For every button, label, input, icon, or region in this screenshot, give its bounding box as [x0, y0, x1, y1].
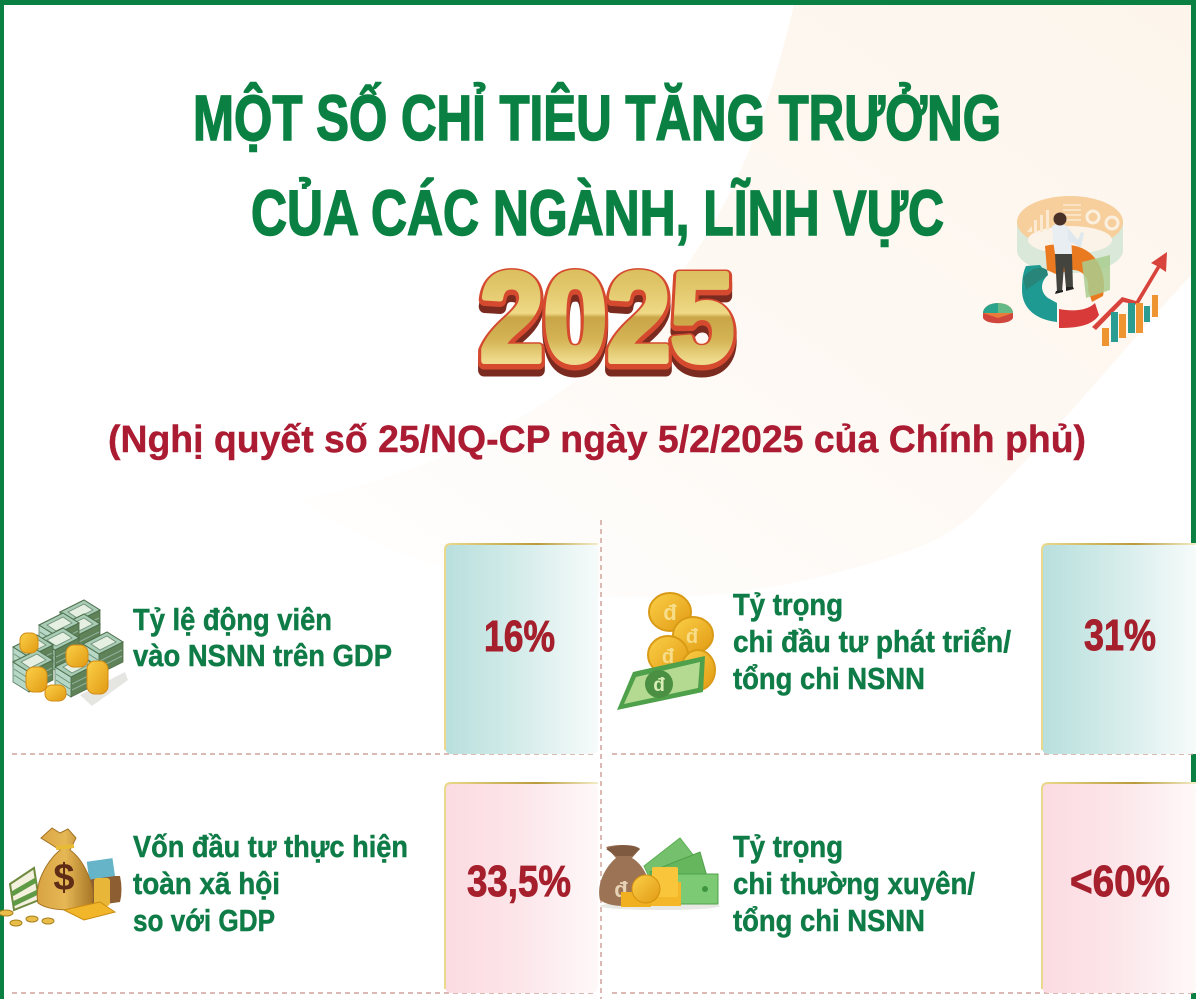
value box: 31% [1084, 611, 1156, 660]
panel: tax mobilisation rate [13, 544, 598, 754]
value box [445, 783, 598, 993]
year 2025: 2025 [480, 249, 734, 390]
value box [445, 544, 598, 754]
label [733, 587, 1011, 696]
icon: money bag, cash, gold bar and coins: $ [53, 857, 75, 899]
icon: dong coins and banknote [617, 593, 715, 710]
label: Tỷ trọng [733, 829, 843, 864]
label: vào NSNN trên GDP [133, 638, 392, 673]
panel: total social investment [0, 783, 598, 993]
illustration: analyst with charts [983, 196, 1167, 346]
value box [1042, 783, 1196, 993]
icon: dong coins and banknote: đ [653, 675, 665, 696]
label: toàn xã hội [133, 866, 280, 901]
label: Vốn đầu tư thực hiện [133, 829, 408, 864]
label: tổng chi NSNN [733, 661, 925, 696]
icon: dong coins and banknote: đ [663, 600, 677, 625]
label: chi thường xuyên/ [733, 866, 975, 901]
label: chi đầu tư phát triển/ [733, 624, 1011, 659]
panel: recurrent spending share [599, 783, 1196, 993]
year 2025: 2025 [480, 256, 734, 397]
icon: sack, banknotes and coins: đ [614, 877, 628, 902]
dashed dividers [12, 520, 1196, 999]
subtitle: (Nghị quyết số 25/NQ-CP ngày 5/2/2025 của Chính phủ) [108, 419, 1086, 461]
value box: <60% [1070, 857, 1170, 906]
icon: dong coins and banknote: đ [662, 646, 675, 668]
panel: development investment share [617, 544, 1196, 754]
label: Tỷ lệ động viên [133, 602, 332, 637]
label [733, 829, 975, 938]
label: so với GDP [133, 903, 275, 938]
value box: 33,5% [467, 857, 571, 906]
label: tổng chi NSNN [733, 903, 925, 938]
icon: dong coins and banknote: đ [686, 626, 699, 648]
value box: 16% [484, 612, 555, 661]
value box [1042, 544, 1196, 754]
label: Tỷ trọng [733, 587, 843, 622]
title: CỦA CÁC NGÀNH, LĨNH VỰC [251, 176, 944, 249]
icon: money stacks and coins [13, 600, 128, 706]
year 2025: 2025 [480, 247, 734, 388]
label [133, 829, 408, 938]
label [133, 602, 392, 673]
icon: money bag, cash, gold bar and coins [0, 828, 122, 926]
title [193, 81, 1001, 249]
icon: sack, banknotes and coins [599, 838, 720, 910]
